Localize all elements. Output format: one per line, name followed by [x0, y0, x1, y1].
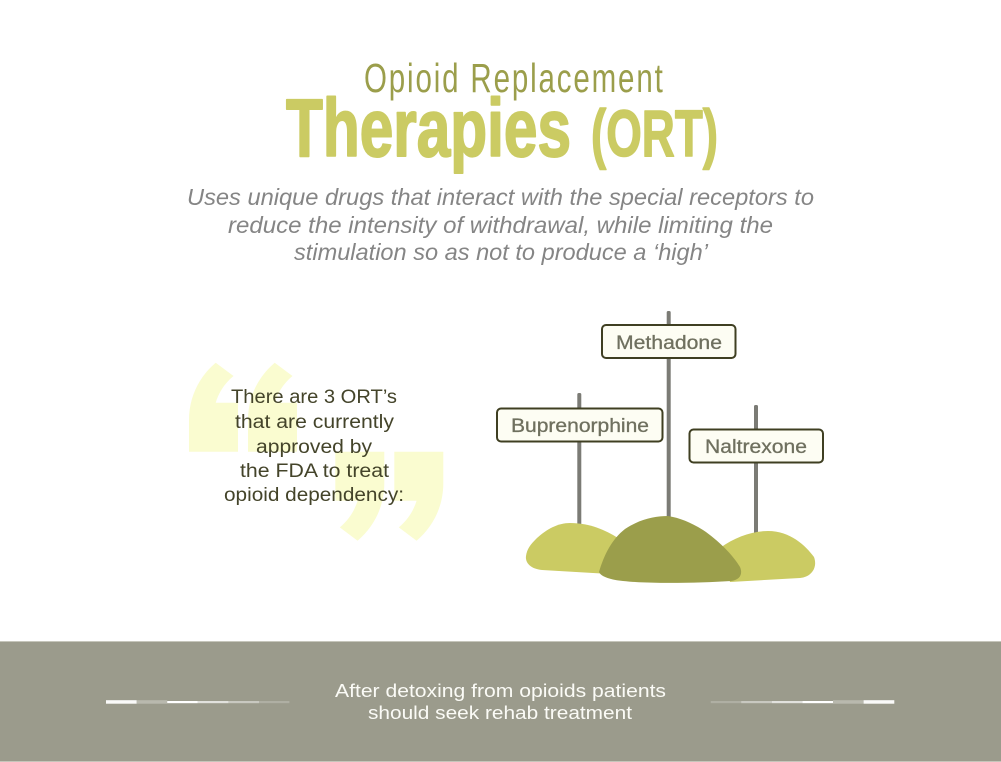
title line 2: Therapies [286, 83, 571, 174]
sign: Naltrexone: Naltrexone [705, 436, 807, 458]
pole: Methadone [667, 311, 671, 521]
banner text: After detoxing from opioids patients [335, 680, 666, 701]
subtitle text block: Uses unique drugs that interact with the special receptors to [187, 184, 814, 210]
sign: Methadone: Methadone [616, 332, 722, 354]
title abbreviation: (ORT) [591, 96, 718, 170]
subtitle text block: stimulation so as not to produce a ‘high’ [294, 239, 709, 265]
quote text: opioid dependency: [224, 485, 404, 506]
left divider line [106, 700, 289, 704]
pole: Naltrexone [754, 405, 758, 537]
icon: closing quotation mark [335, 452, 443, 541]
quote text [224, 387, 404, 506]
banner background [0, 642, 1001, 762]
quote text: that are currently [235, 412, 395, 433]
title line 1: Opioid Replacement [364, 55, 663, 101]
sign: Naltrexone [690, 430, 823, 462]
sign: Buprenorphine: Buprenorphine [511, 415, 649, 437]
mound: center [599, 516, 741, 583]
pole: Buprenorphine [577, 393, 581, 527]
footer banner [0, 642, 1001, 762]
mound: left [526, 523, 618, 574]
subtitle text block: reduce the intensity of withdrawal, while limiting the [228, 212, 773, 238]
right divider line [711, 700, 894, 704]
title [286, 55, 718, 174]
sign: Methadone [602, 325, 736, 358]
quote text: approved by [256, 437, 373, 458]
banner text [335, 680, 666, 723]
quote text: There are 3 ORT’s [231, 387, 397, 408]
quote panel [189, 363, 443, 541]
banner text: should seek rehab treatment [368, 702, 632, 723]
icon: opening quotation mark [189, 363, 297, 452]
quote text: the FDA to treat [240, 461, 390, 482]
signposts illustration [497, 311, 823, 583]
subtitle text block [187, 184, 814, 265]
mound: right [720, 531, 815, 582]
sign: Buprenorphine [497, 408, 662, 442]
